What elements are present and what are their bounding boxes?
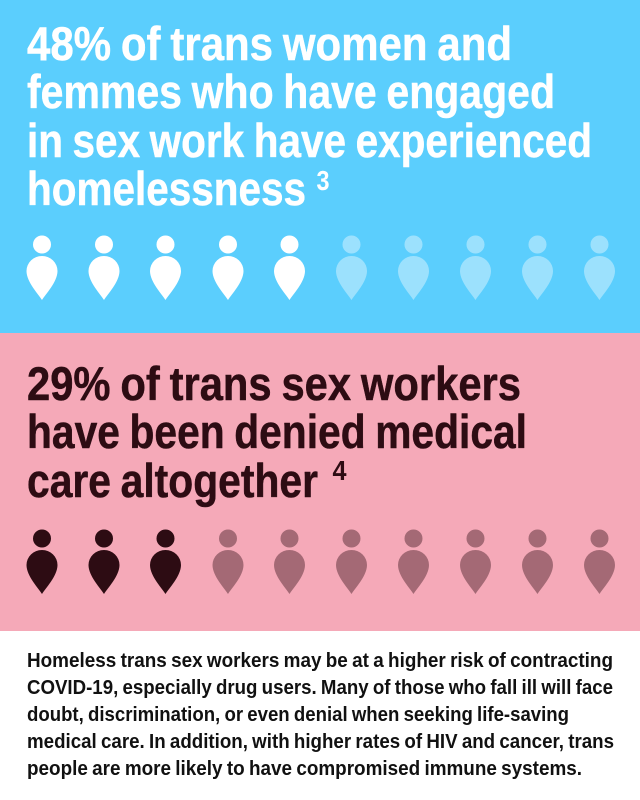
heading: 29% denied medical care: care altogether [27, 454, 318, 507]
panel background: blue [0, 0, 640, 333]
text block: COVID-19 risk explanation: people are more likely to have compromised immune systems. [27, 758, 582, 780]
heading: 29% denied medical care: 29% of trans sex workers [27, 357, 521, 410]
panel background: pink [0, 333, 640, 631]
text block: COVID-19 risk explanation [27, 650, 614, 780]
heading: 48% homelessness: homelessness [27, 162, 306, 215]
text block: COVID-19 risk explanation: doubt, discrimination, or even denial when seeking life-saving [27, 704, 569, 726]
heading: 48% homelessness: 3 [316, 165, 330, 196]
pictogram: 5 of 10 people highlighted [26, 236, 615, 300]
pictogram: 3 of 10 people highlighted [26, 530, 615, 594]
heading: 29% denied medical care: have been denied medical [27, 405, 527, 458]
heading: 29% denied medical care: 4 [332, 455, 347, 486]
panel: homelessness statistic [0, 0, 640, 333]
text block: COVID-19 risk explanation: COVID-19, especially drug users. Many of those who fall ill will face [27, 677, 613, 699]
heading: 29% denied medical care [27, 357, 527, 507]
text block: COVID-19 risk explanation: medical care. In addition, with higher rates of HIV and cancer, trans [27, 731, 614, 753]
panel: medical care statistic [0, 333, 640, 631]
heading: 48% homelessness [27, 17, 592, 215]
heading: 48% homelessness: 48% of trans women and [27, 17, 512, 70]
text block: COVID-19 risk explanation: Homeless trans sex workers may be at a higher risk of contracting [27, 650, 613, 672]
heading: 48% homelessness: femmes who have engaged [27, 65, 555, 118]
